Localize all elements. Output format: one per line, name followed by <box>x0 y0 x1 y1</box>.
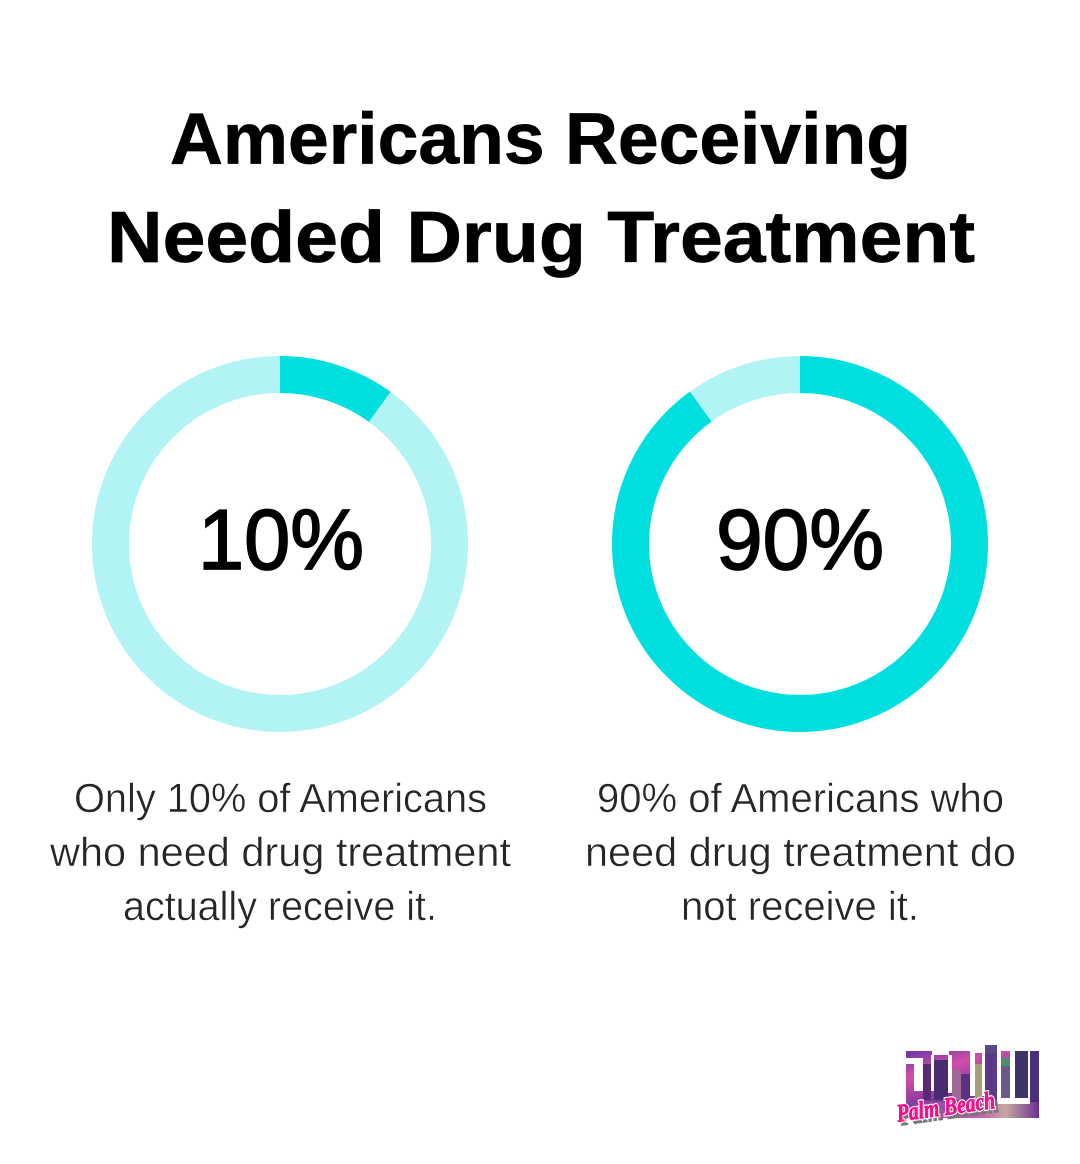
caption: 10%: actually receive it. <box>123 883 437 929</box>
caption: 10% <box>49 775 512 929</box>
caption: 90% <box>585 775 1016 929</box>
caption: 10%: who need drug treatment <box>49 829 512 875</box>
logo script: Palm Beach: Palm Beach <box>894 1087 997 1128</box>
title: Americans Receiving <box>170 100 911 180</box>
title: Needed Drug Treatment <box>107 198 975 278</box>
logo script: Palm Beach: Palm Beach <box>898 1091 1000 1131</box>
donut chart: 10% <box>110 374 450 714</box>
caption: 90%: not receive it. <box>681 883 919 929</box>
donut chart: 90% <box>630 374 970 714</box>
panel: 90% do not receive treatment <box>585 374 1016 929</box>
caption: 90%: 90% of Americans who <box>597 775 1004 821</box>
logo city image <box>906 1045 1039 1118</box>
panel: 10% receive treatment <box>49 374 512 929</box>
logo script: Palm Beach: Palm Beach <box>894 1087 997 1128</box>
value: 10%: 10% <box>198 493 364 588</box>
value: 90%: 90% <box>716 493 884 588</box>
logo letter shapes <box>906 1045 1030 1104</box>
logo: Amity Palm Beach <box>894 1045 1039 1131</box>
caption: 90%: need drug treatment do <box>585 829 1016 875</box>
title <box>107 100 975 278</box>
caption: 10%: Only 10% of Americans <box>74 775 487 821</box>
